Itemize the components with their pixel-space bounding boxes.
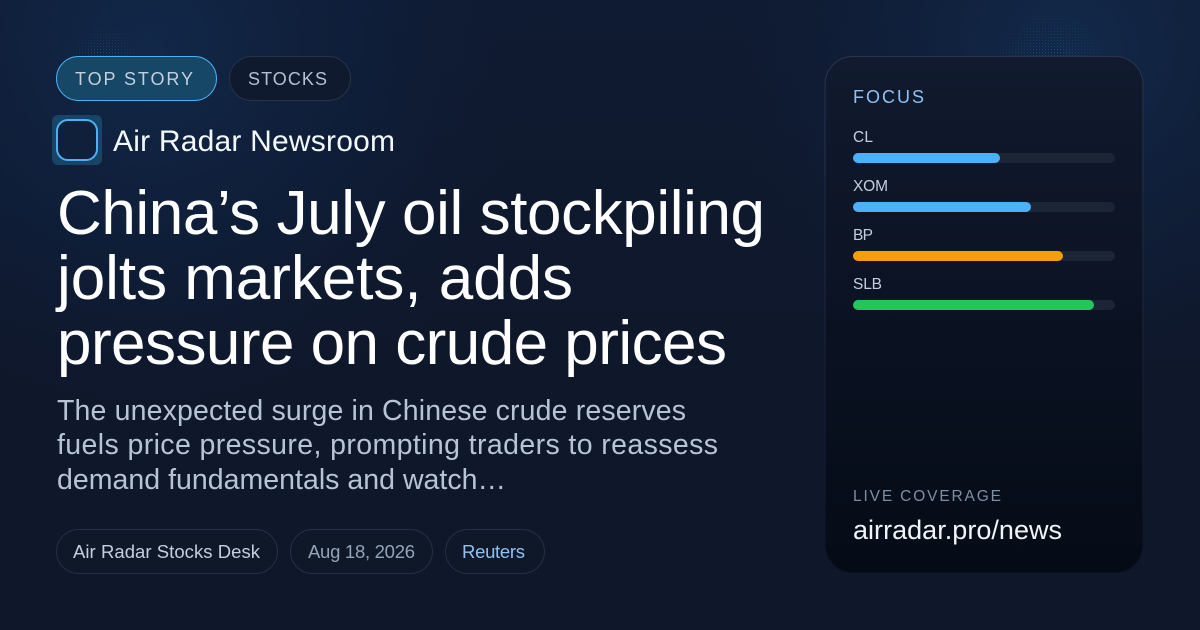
title (55, 179, 765, 378)
subtitle: fuels price pressure, prompting traders to reassess (57, 429, 718, 461)
subtitle: The unexpected surge in Chinese crude reserves (57, 395, 686, 427)
bar: XOM: XOM (853, 178, 888, 195)
tag pill: stocks (230, 56, 350, 100)
bar: CL: CL (853, 129, 873, 146)
brand name: Air Radar Newsroom (113, 125, 395, 158)
tag pill: stocks: STOCKS (248, 69, 327, 89)
meta chip: source: Reuters (462, 541, 525, 562)
panel: focus card (825, 56, 1143, 573)
meta chip: desk (56, 530, 278, 574)
bar: BP (853, 227, 1115, 261)
title: pressure on crude prices (57, 309, 727, 378)
live coverage label: LIVE COVERAGE (853, 488, 1001, 505)
focus heading: FOCUS (853, 87, 924, 107)
icon: newsroom logo (52, 115, 102, 165)
bar: CL (853, 129, 1115, 163)
bar: XOM (853, 178, 1115, 212)
bar: BP: BP (853, 227, 873, 244)
title: China’s July oil stockpiling (57, 179, 765, 248)
meta chip: date (290, 530, 432, 574)
bar: SLB: SLB (853, 276, 882, 293)
meta chip: date: Aug 18, 2026 (308, 541, 415, 562)
title: jolts markets, adds (55, 244, 573, 313)
meta chip: source (446, 530, 544, 574)
url: airradar.pro/news (853, 515, 1062, 545)
bar: SLB (853, 276, 1115, 310)
subtitle: demand fundamentals and watch… (57, 464, 506, 496)
tag pill: top story (56, 56, 216, 100)
meta chip: desk: Air Radar Stocks Desk (73, 541, 261, 562)
tag pill: top story: TOP STORY (75, 69, 193, 89)
subtitle (57, 395, 718, 496)
